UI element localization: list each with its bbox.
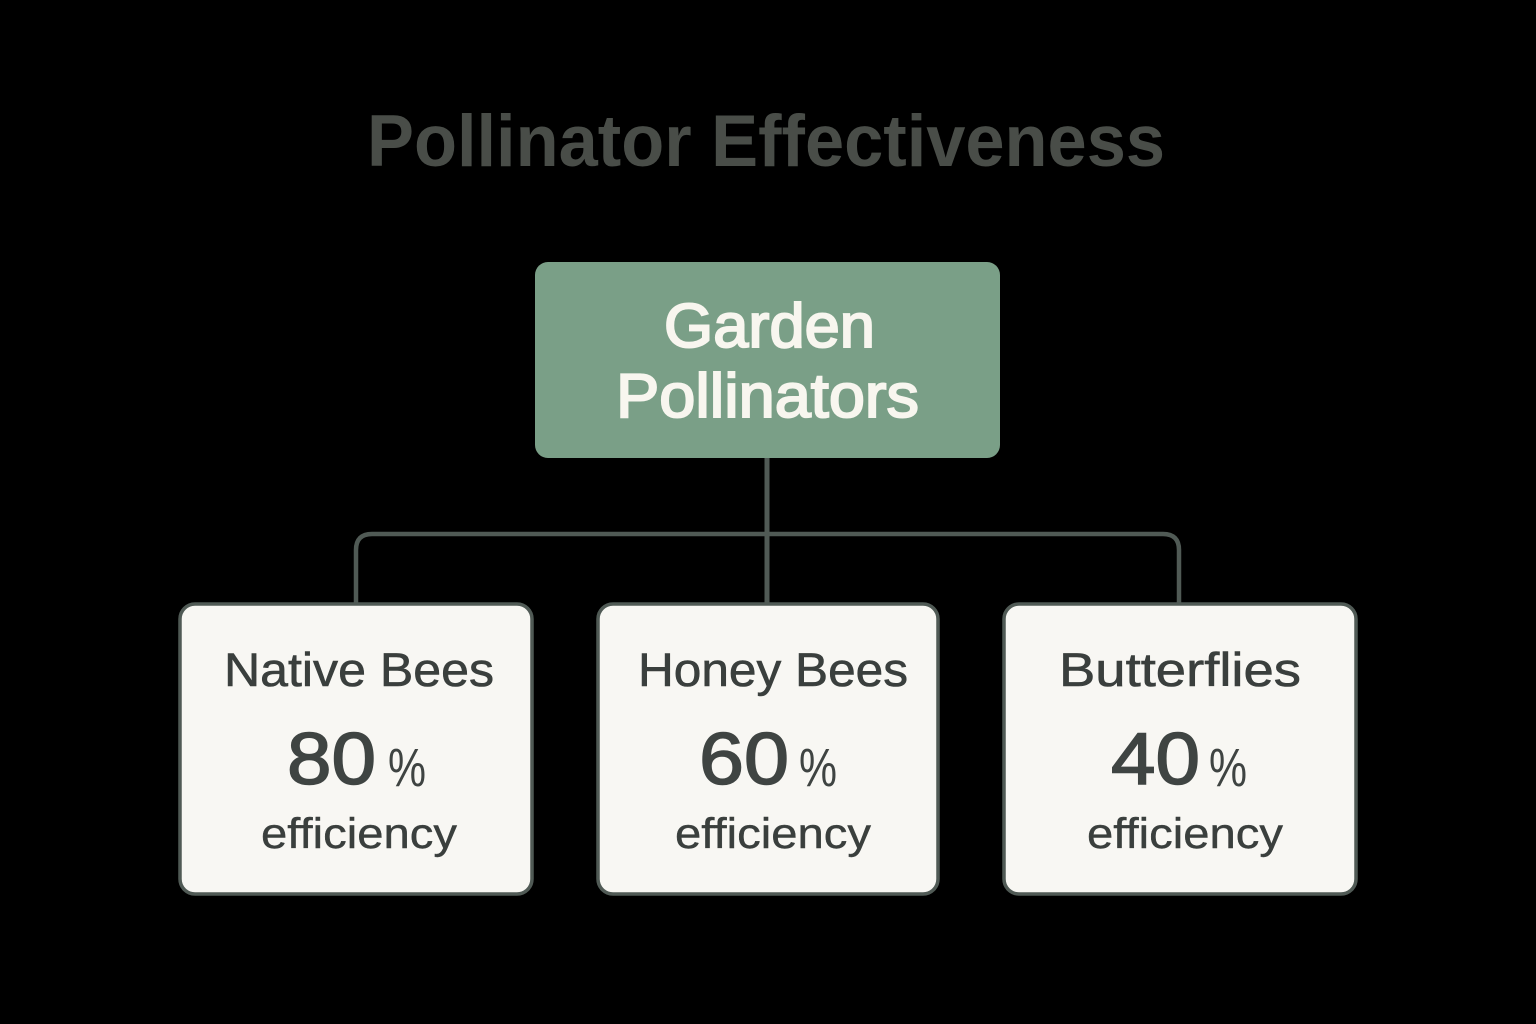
card: Native Bees: 80: [287, 719, 376, 800]
card: Native Bees: [180, 604, 532, 894]
root node: Garden Pollinators: Garden: [664, 292, 875, 361]
card: Butterflies: %: [1209, 738, 1247, 798]
card: Native Bees: efficiency: [261, 810, 458, 858]
card: Honey Bees: Honey Bees: [638, 643, 908, 696]
card: Butterflies: [1004, 604, 1356, 894]
card: Honey Bees: efficiency: [675, 810, 872, 858]
title: Pollinator Effectiveness: [367, 101, 1165, 182]
card: Honey Bees: 60: [699, 719, 789, 800]
card: Butterflies: Butterflies: [1059, 643, 1301, 696]
root node: Garden Pollinators: [535, 262, 1000, 458]
card: Butterflies: efficiency: [1087, 810, 1284, 858]
card: Native Bees: Native Bees: [224, 643, 494, 696]
card: Butterflies: 40: [1111, 719, 1200, 800]
connector lines: [356, 457, 1179, 604]
card: Honey Bees: [598, 604, 938, 894]
root node: Garden Pollinators: Pollinators: [616, 362, 919, 431]
card: Honey Bees: %: [799, 738, 837, 798]
card: Native Bees: %: [388, 738, 426, 798]
